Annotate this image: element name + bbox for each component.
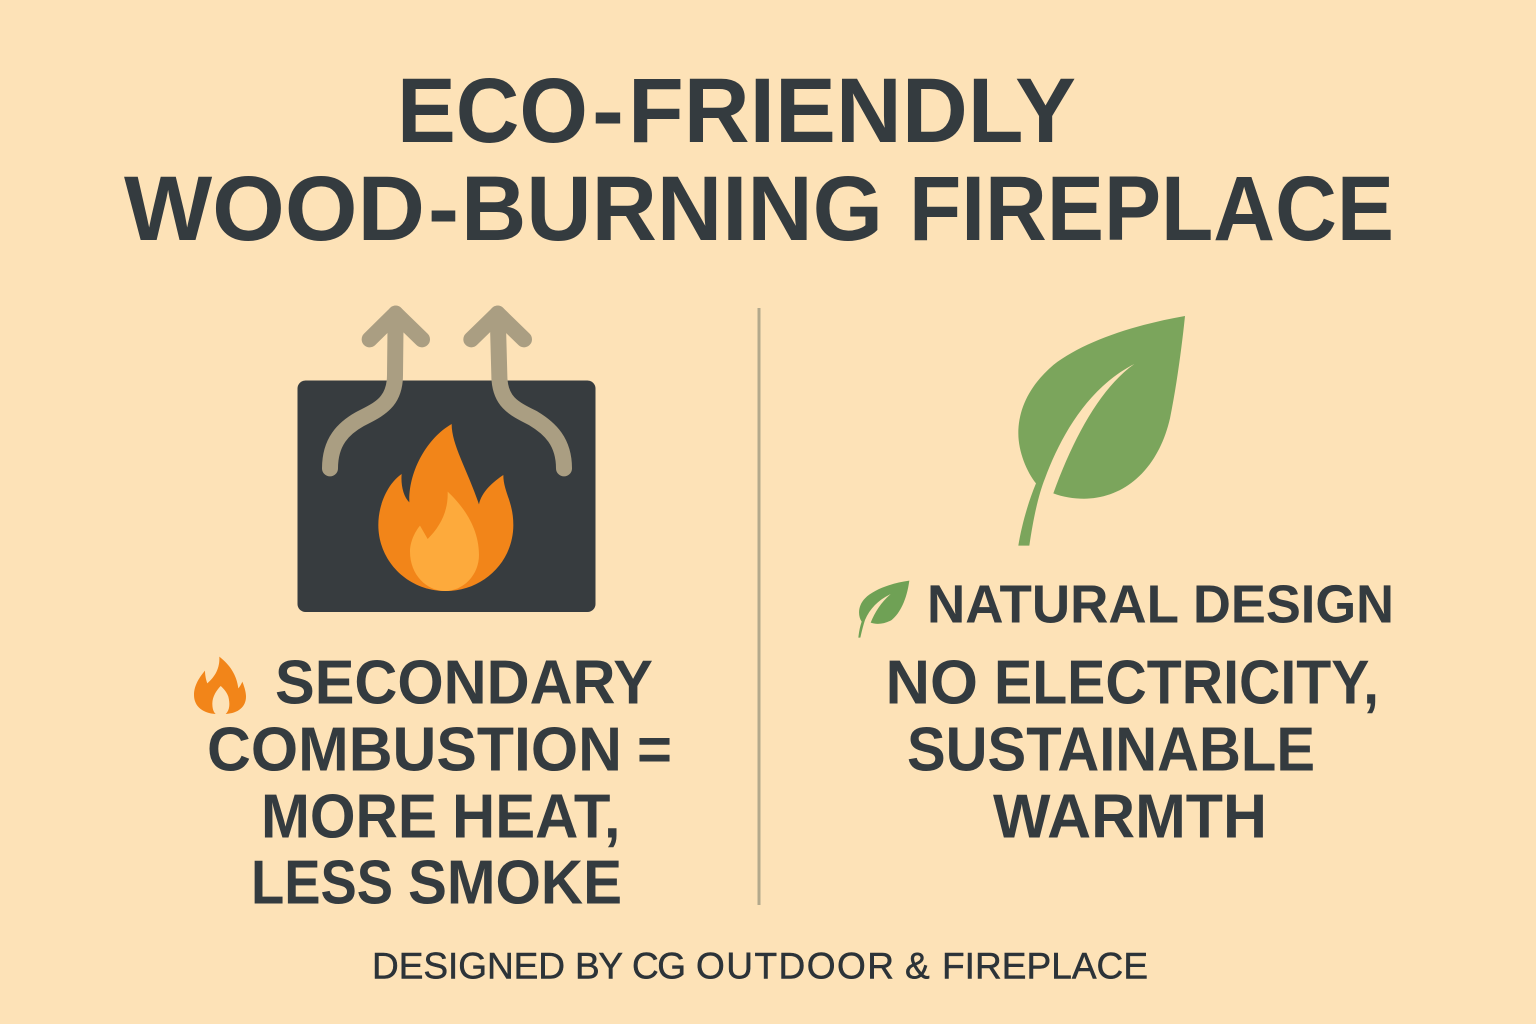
text: no electricity message: SUSTAINABLE — [907, 716, 1315, 784]
footer credit: CG — [632, 945, 686, 986]
panel: secondary combustion — [194, 314, 672, 917]
title: WOOD — [124, 158, 425, 260]
arrow: left smoke flow — [330, 314, 422, 468]
panel: natural design — [858, 316, 1394, 852]
heading: natural design — [927, 574, 1394, 634]
text: no electricity message: WARMTH — [993, 782, 1267, 852]
text: secondary combustion message: COMBUSTION — [207, 716, 622, 784]
arrow: right smoke flow — [471, 314, 564, 468]
text: secondary combustion message: SECONDARY — [275, 648, 653, 718]
title: ECO — [397, 60, 588, 162]
title: - — [428, 158, 459, 260]
text: secondary combustion message: MORE — [261, 782, 437, 852]
title: - — [592, 60, 624, 162]
footer credit: OUTDOOR — [696, 945, 894, 986]
icon: small flame — [194, 657, 246, 714]
heading: natural design: DESIGN — [1193, 574, 1394, 634]
footer credit — [372, 945, 1148, 986]
text: secondary combustion message: SMOKE — [408, 848, 622, 918]
title: FIREPLACE — [909, 158, 1394, 260]
icon: large leaf — [1018, 316, 1185, 546]
text: no electricity message: NO — [886, 648, 978, 718]
text: secondary combustion message: LESS — [251, 848, 393, 918]
text: secondary combustion message: = — [637, 716, 672, 784]
footer credit: FIREPLACE — [942, 945, 1148, 986]
title: BURNING — [461, 158, 883, 260]
text: secondary combustion message — [207, 648, 672, 918]
title — [124, 60, 1394, 260]
icon: large flame — [378, 424, 513, 591]
heading: natural design: NATURAL — [927, 574, 1179, 634]
title: FRIENDLY — [628, 60, 1076, 162]
footer credit: DESIGNED — [372, 945, 565, 986]
icon: small leaf — [858, 581, 909, 638]
icon: fireplace with flame and smoke arrows — [298, 314, 596, 612]
text: no electricity message — [886, 648, 1379, 852]
footer credit: & — [905, 945, 930, 986]
text: no electricity message: ELECTRICITY, — [994, 648, 1379, 718]
text: secondary combustion message: HEAT, — [452, 782, 620, 852]
footer credit: BY — [575, 945, 623, 986]
